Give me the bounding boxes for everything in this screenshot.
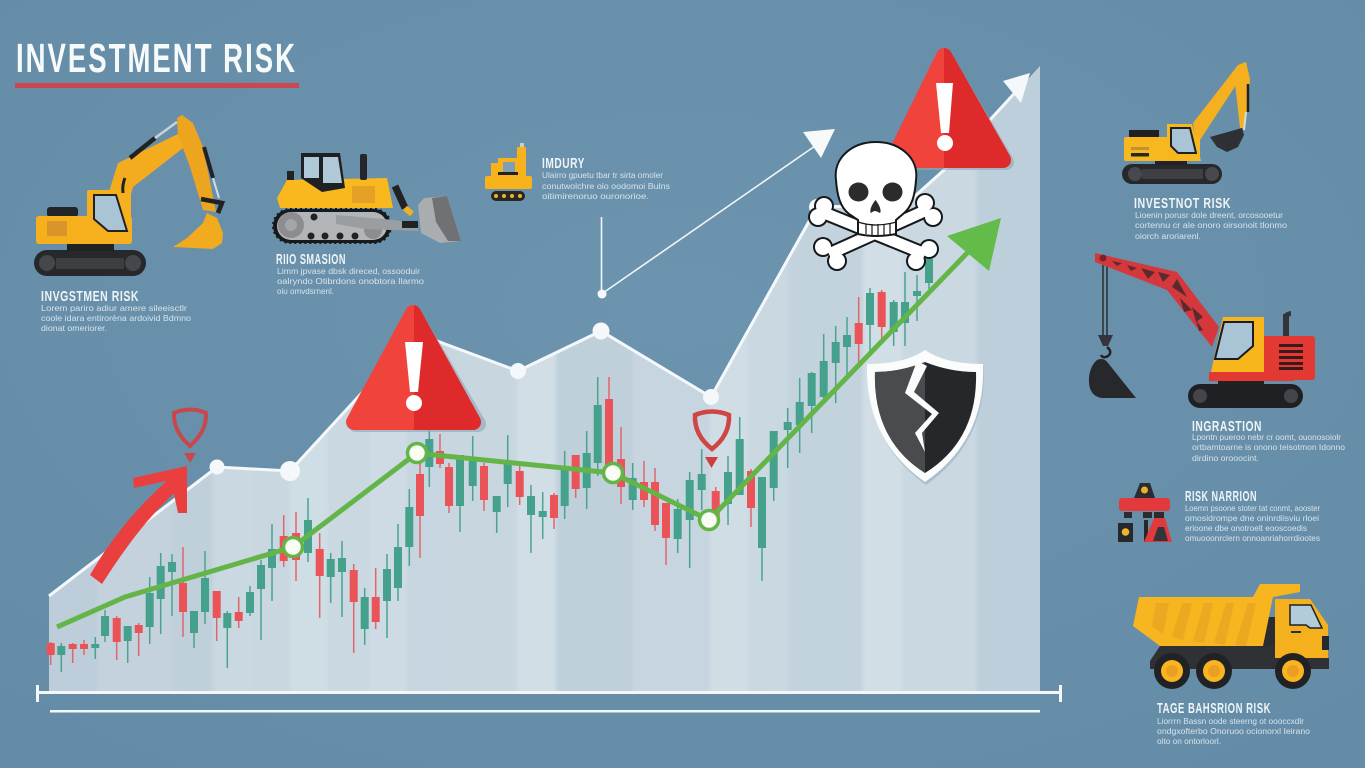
icon: red crane: [1089, 253, 1315, 408]
text block: bulldozer risk: [276, 251, 424, 296]
text block: crane: ortbamtoarne is onono teisotmon Idonno: [1192, 442, 1345, 452]
white data points: [210, 199, 825, 481]
text block: risk narration: RISK NARRION: [1185, 488, 1257, 505]
text block: industry: Ulairro gpuetu tbar tr sirta omoler: [542, 170, 663, 180]
text block: bulldozer risk: Limm jpvase dbsk direced, ossooduir: [277, 266, 420, 276]
icon: warning triangle top: [893, 56, 1006, 162]
text block: truck risk: oito on ontorloorl.: [1157, 736, 1221, 746]
text block: crane: INGRASTION: [1192, 418, 1262, 435]
text block: right excavator: INVESTNOT RISK: [1134, 195, 1231, 212]
text block: bulldozer risk: oiu omvdsrnenl.: [277, 286, 334, 296]
text block: risk narration: erioone dbe onotroelt eooscoedis: [1185, 523, 1307, 533]
icon: large excavator: [34, 115, 223, 276]
axis lines: [36, 685, 1062, 712]
icon: dump truck: [1133, 584, 1329, 689]
text block: truck risk: ondgxofterbo Onoruoo ocionorxl Ieirano: [1157, 726, 1310, 736]
title: [15, 35, 299, 88]
area fill with vertical bands: [40, 60, 1050, 700]
text block: crane: [1192, 418, 1345, 463]
text block: right excavator: cortennu cr ale onoro oirsonoit tlonmo: [1135, 220, 1287, 230]
text block: risk narration: Loemn psoone stoter tat conmt, aooster: [1185, 503, 1320, 513]
green trend line with arrow: [57, 218, 1001, 627]
white trend line: [49, 85, 1022, 596]
text block: risk narration: omuooonrclern onnoanriahorrdiootes: [1185, 533, 1320, 543]
text block: bulldozer risk: RIIO SMASION: [276, 251, 346, 268]
icon: skull and crossbones: [808, 142, 943, 271]
text block: right excavator: oiorch aroriarenl.: [1135, 231, 1201, 241]
text block: excavator risk: coole idara entirorèna ardoivid Bdmno: [41, 313, 191, 323]
text block: right excavator: [1134, 195, 1287, 241]
text block: excavator risk: INVGSTMEN RISK: [41, 288, 139, 305]
text block: industry: [542, 155, 670, 201]
icon: small shield centre: [695, 412, 729, 468]
icon: bulldozer: [273, 153, 461, 243]
text block: right excavator: Lioenin porusr dole dreent, orcosooetur: [1135, 210, 1283, 220]
text block: truck risk: [1157, 700, 1310, 746]
icon: small shield left: [174, 410, 206, 463]
icon: small crane machine: [1118, 483, 1172, 542]
text block: bulldozer risk: oalryndo Otibrdons onobtora Ilarmo: [277, 276, 424, 286]
candlestick chart: [51, 255, 929, 672]
title: INVESTMENT RISK: [16, 35, 297, 81]
text block: excavator risk: dionat omeriorer.: [41, 323, 107, 333]
panel: risk area chart: [40, 60, 1050, 700]
text block: truck risk: TAGE BAHSRION RISK: [1157, 700, 1271, 717]
icon: right excavator: [1122, 62, 1250, 184]
text block: risk narration: omosidrompe dne oninrdiisviu rloei: [1185, 513, 1319, 523]
text block: industry: oitimirenoruo ouronorioe.: [542, 191, 649, 201]
white trend arrowhead: [1003, 73, 1030, 103]
icon: warning triangle centre: [354, 313, 478, 424]
icon: red curved arrow: [90, 466, 187, 584]
text block: industry: IMDURY: [542, 155, 585, 172]
text block: crane: dirdino orooocint.: [1192, 453, 1259, 463]
icon: small dozer: [485, 143, 532, 201]
text block: excavator risk: Lorem pariro adiur amere sileeisctlr: [41, 303, 187, 313]
text block: truck risk: Liorrrn Bassn oode steerng ot oooccxdlr: [1157, 716, 1304, 726]
text block: risk narration: [1185, 488, 1320, 543]
text block: excavator risk: [41, 288, 191, 333]
text block: crane: Lpontn pueroo nebr cr oomt, ouonosoiolr: [1192, 432, 1341, 442]
text block: industry: conutwolchre oio oodomoi Bulns: [542, 181, 670, 191]
thin white callout arrow: [598, 129, 835, 298]
icon: broken shield: [867, 350, 984, 485]
